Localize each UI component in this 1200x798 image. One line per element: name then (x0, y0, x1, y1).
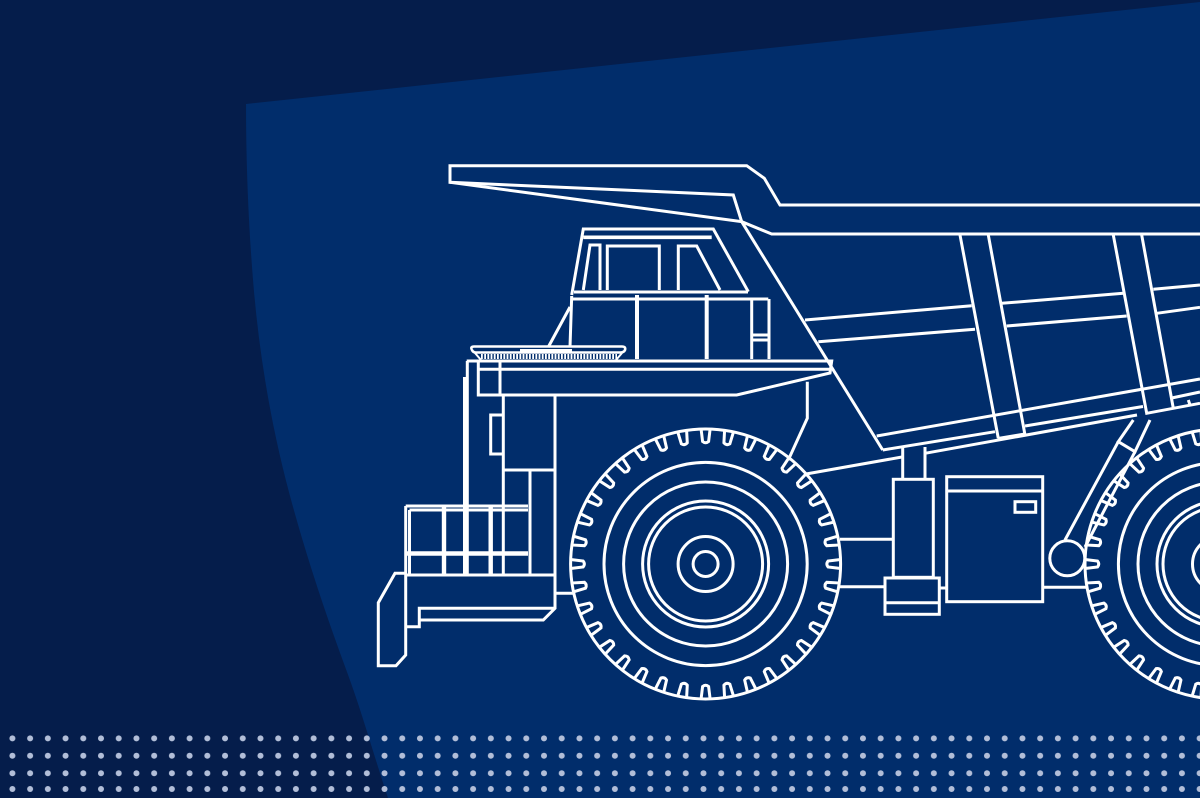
curved blue panel (246, 2, 1200, 798)
dump body (450, 166, 1200, 474)
engine column and front grille (406, 361, 555, 575)
cab (548, 229, 769, 359)
rear wheel (1085, 429, 1200, 699)
body ribs and rails (805, 235, 1200, 438)
dot strip (0, 730, 1200, 798)
fuel tank box (947, 477, 1043, 602)
chassis lines (555, 382, 1087, 593)
suspension strut (885, 447, 939, 614)
hoist cylinder arm (1050, 420, 1150, 576)
deck platform (467, 361, 832, 395)
truck line drawing (378, 166, 1200, 699)
deck light bar (471, 346, 625, 360)
front bumper (378, 506, 555, 666)
front wheel (571, 429, 841, 699)
